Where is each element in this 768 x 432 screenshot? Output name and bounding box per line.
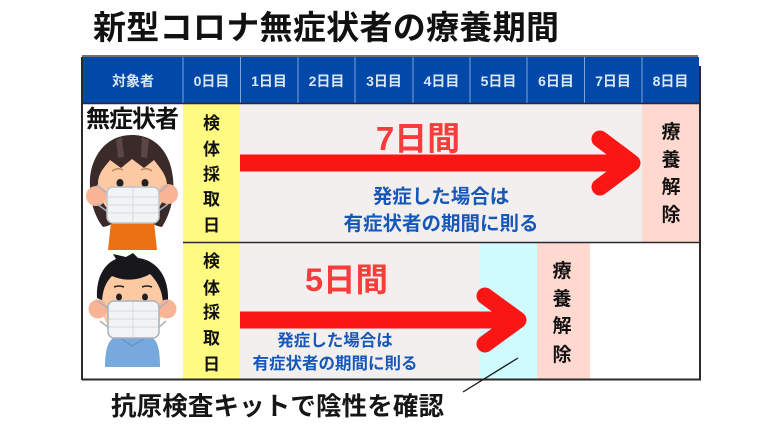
row 2 test day column: 日	[203, 355, 220, 374]
row 1 test day column: 体	[203, 140, 220, 159]
row 2 label: 5 days: 5日間	[305, 262, 388, 298]
row 1 test day column: 取	[203, 190, 220, 209]
callout: antigen test kit	[111, 358, 518, 421]
row 1 release column: 療	[661, 121, 681, 143]
header row: 4日目	[424, 73, 459, 89]
callout: antigen test kit: 抗原検査キットで陰性を確認	[111, 393, 444, 421]
header row: 0日目	[194, 73, 229, 89]
row 2 note	[252, 331, 418, 373]
header row: 2日目	[309, 73, 344, 89]
header row: 7日目	[595, 73, 631, 89]
header row: 3日目	[366, 73, 402, 89]
row 1 release column: 解	[661, 176, 681, 198]
row 1 test day column: 検	[203, 114, 220, 133]
row 2 test day column: 検	[203, 252, 220, 271]
row 2 release column: 養	[552, 288, 572, 310]
row 1 test day column	[183, 104, 240, 242]
row 2 note: 有症状者の期間に則る	[252, 354, 418, 373]
row 1 note: 有症状者の期間に則る	[343, 213, 539, 235]
row 2 arrow	[240, 296, 518, 344]
row 1 test day column: 採	[203, 165, 220, 184]
panel: row 1 asymptomatic 7 days	[183, 104, 699, 242]
header row: 8日目	[653, 73, 688, 89]
header row: 5日目	[481, 73, 516, 89]
row 1 arrow	[240, 139, 632, 187]
icon: man with mask	[88, 253, 176, 367]
label: asymptomatic person: 無症状者	[86, 106, 179, 133]
row 2 antigen test column	[480, 243, 537, 379]
row 1 label: 7 days: 7日間	[376, 120, 460, 157]
row 2 grey period background	[240, 243, 480, 379]
icon: woman with mask	[86, 135, 178, 250]
row 2 note: 発症した場合は	[277, 331, 393, 350]
row 2 test day column: 取	[203, 329, 220, 348]
row 1 note: 発症した場合は	[373, 186, 509, 208]
row 1 release column	[642, 104, 699, 242]
row 2 release column: 除	[552, 344, 572, 366]
header row: 1日目	[251, 73, 287, 89]
row 2 release column: 療	[552, 260, 572, 282]
row 1 note	[343, 186, 539, 235]
row 2 test day column: 採	[203, 303, 220, 322]
row 1 release column: 養	[661, 149, 681, 171]
title: 新型コロナ無症状者の療養期間	[93, 9, 559, 46]
row 2 test day column: 体	[203, 279, 220, 298]
row 1 test day column: 日	[203, 216, 220, 235]
row 1 release column: 除	[661, 204, 681, 226]
row 1 grey period background	[240, 104, 642, 242]
panel: row 2 asymptomatic 5 days	[183, 243, 590, 379]
row 2 release column	[537, 243, 590, 379]
header row: 6日目	[538, 73, 574, 89]
header row: 対象者	[112, 73, 154, 89]
table frame	[82, 56, 701, 380]
row 2 test day column	[183, 243, 240, 379]
row 2 release column: 解	[552, 315, 572, 337]
header row	[82, 57, 699, 103]
